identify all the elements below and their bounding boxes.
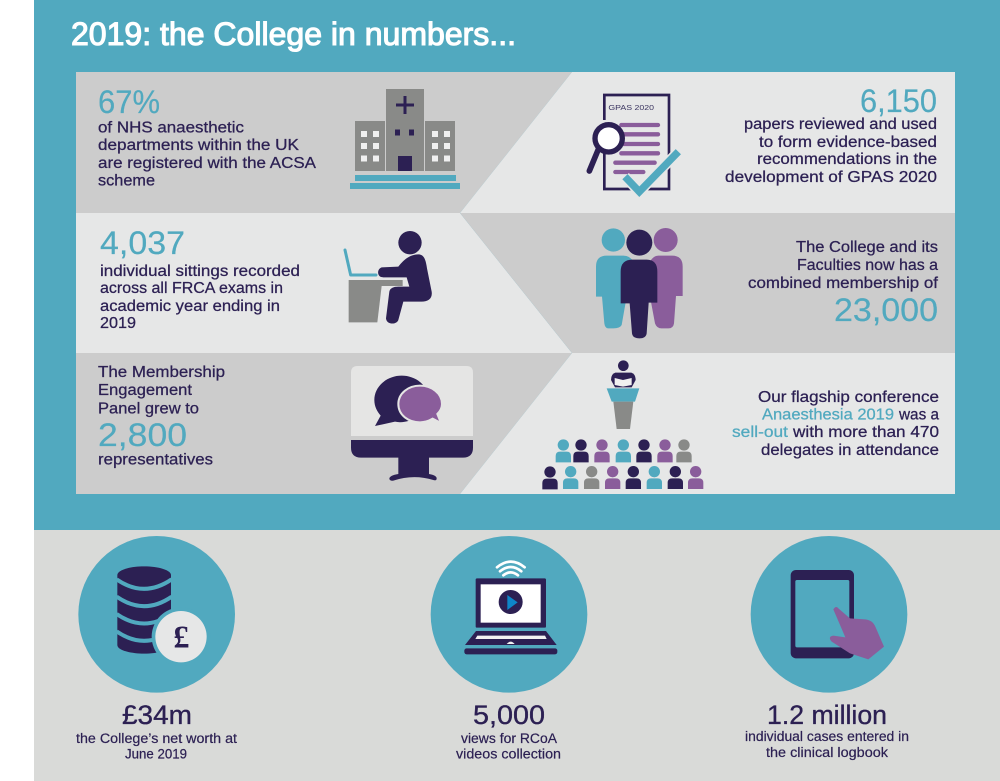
panel: GPAS 6,150 — [460, 72, 955, 213]
icon: coin stack with pound — [78, 536, 235, 693]
footer stat: net worth — [76, 536, 237, 762]
panel: membership 23,000 — [460, 213, 955, 353]
stat text: 6,150: papers reviewed and used — [744, 116, 937, 133]
footer stat: clinical logbook — [745, 536, 909, 760]
stat text: 23,000: The College and its — [796, 239, 938, 256]
stat text: 2,800 — [98, 364, 225, 468]
stat text: Anaesthesia 2019: with more than 470 — [792, 424, 939, 441]
stat text: 4,037: academic year ending in — [100, 298, 280, 315]
panel: FRCA 4,037 — [76, 213, 572, 353]
icon: person at desk with laptop — [345, 231, 432, 324]
stat text: 1.2 million: individual cases entered in — [745, 729, 909, 744]
stat text: £34m: £34m — [122, 700, 192, 730]
stat text: 4,037: 4,037 — [100, 225, 185, 261]
stat text: 67%: departments within the UK — [98, 137, 300, 154]
stat text: Anaesthesia 2019: was a — [898, 406, 939, 424]
stat text: 4,037: 2019 — [100, 315, 136, 332]
icon: laptop with play button and wifi — [431, 536, 587, 693]
stat text: 2,800: representatives — [98, 452, 213, 468]
stat text: 6,150: development of GPAS 2020 — [725, 169, 937, 186]
stat text: Anaesthesia 2019: Anaesthesia 2019 — [762, 406, 894, 424]
icon: GPAS document with magnifier and tick: GPAS 2020 — [608, 103, 654, 112]
stat text: 6,150: recommendations in the — [757, 151, 937, 168]
panel: conference 470 delegates — [460, 353, 955, 494]
stat text: 67% — [98, 84, 317, 190]
stat text: £34m: the College’s net worth at — [76, 731, 237, 746]
stat text: Anaesthesia 2019: delegates in attendance — [761, 442, 939, 459]
stat text: 4,037: individual sittings recorded — [100, 263, 300, 280]
stat text: Anaesthesia 2019: Our flagship conference — [758, 389, 939, 406]
panel: ACSA 67% — [76, 72, 572, 213]
grey footer background — [34, 530, 1000, 781]
icon: GPAS document with magnifier and tick — [589, 95, 678, 192]
stat text: 6,150: to form evidence-based — [759, 134, 937, 151]
stat text: 5,000: 5,000 — [473, 700, 545, 730]
stat text: 5,000: views for RCoA — [461, 731, 557, 746]
stat text: 2,800: Engagement — [98, 382, 193, 399]
stat text: 1.2 million — [745, 700, 909, 760]
stat text: 4,037 — [100, 225, 300, 332]
stat text: 1.2 million: the clinical logbook — [766, 745, 888, 760]
stat text: £34m — [76, 700, 237, 762]
stat text: 23,000: 23,000 — [834, 292, 938, 328]
stat text: 5,000: videos collection — [456, 746, 561, 762]
stat text: 23,000: combined membership of — [748, 275, 939, 292]
stat text: 1.2 million: 1.2 million — [767, 700, 887, 730]
icon: monitor with speech bubbles — [351, 366, 473, 481]
icon: speaker at podium with audience — [542, 360, 703, 489]
stat text: 2,800: 2,800 — [98, 417, 187, 453]
stat text: £34m: June 2019 — [125, 746, 187, 762]
stat text: 67%: are registered with the ACSA — [98, 155, 317, 172]
stat text: 5,000 — [456, 700, 561, 762]
teal header background — [34, 0, 1000, 530]
stat text: 67%: scheme — [98, 172, 155, 190]
stat text: 2,800: The Membership — [98, 364, 225, 381]
stat text: 23,000 — [748, 239, 939, 328]
title: 2019: the College in numbers... — [71, 16, 516, 52]
stat text: 67%: of NHS anaesthetic — [98, 120, 244, 136]
panel: Membership Engagement Panel 2,800 — [76, 353, 572, 494]
stat text: 6,150: 6,150 — [860, 83, 937, 119]
footer stat: video views — [431, 536, 587, 762]
stat text: 4,037: across all FRCA exams in — [100, 280, 283, 297]
stat text: 67%: 67% — [98, 84, 160, 120]
stat text: 6,150 — [725, 83, 937, 186]
icon: three people — [596, 228, 683, 338]
stat text: 23,000: Faculties now has a — [797, 257, 938, 274]
icon: coin stack with pound: £ — [173, 618, 189, 654]
stat text: Anaesthesia 2019 — [732, 389, 939, 459]
stat text: Anaesthesia 2019: sell-out — [732, 424, 789, 441]
stat text: 2,800: Panel grew to — [98, 400, 199, 418]
icon: tablet with pointing hand — [751, 536, 907, 693]
icon: hospital — [350, 89, 460, 189]
